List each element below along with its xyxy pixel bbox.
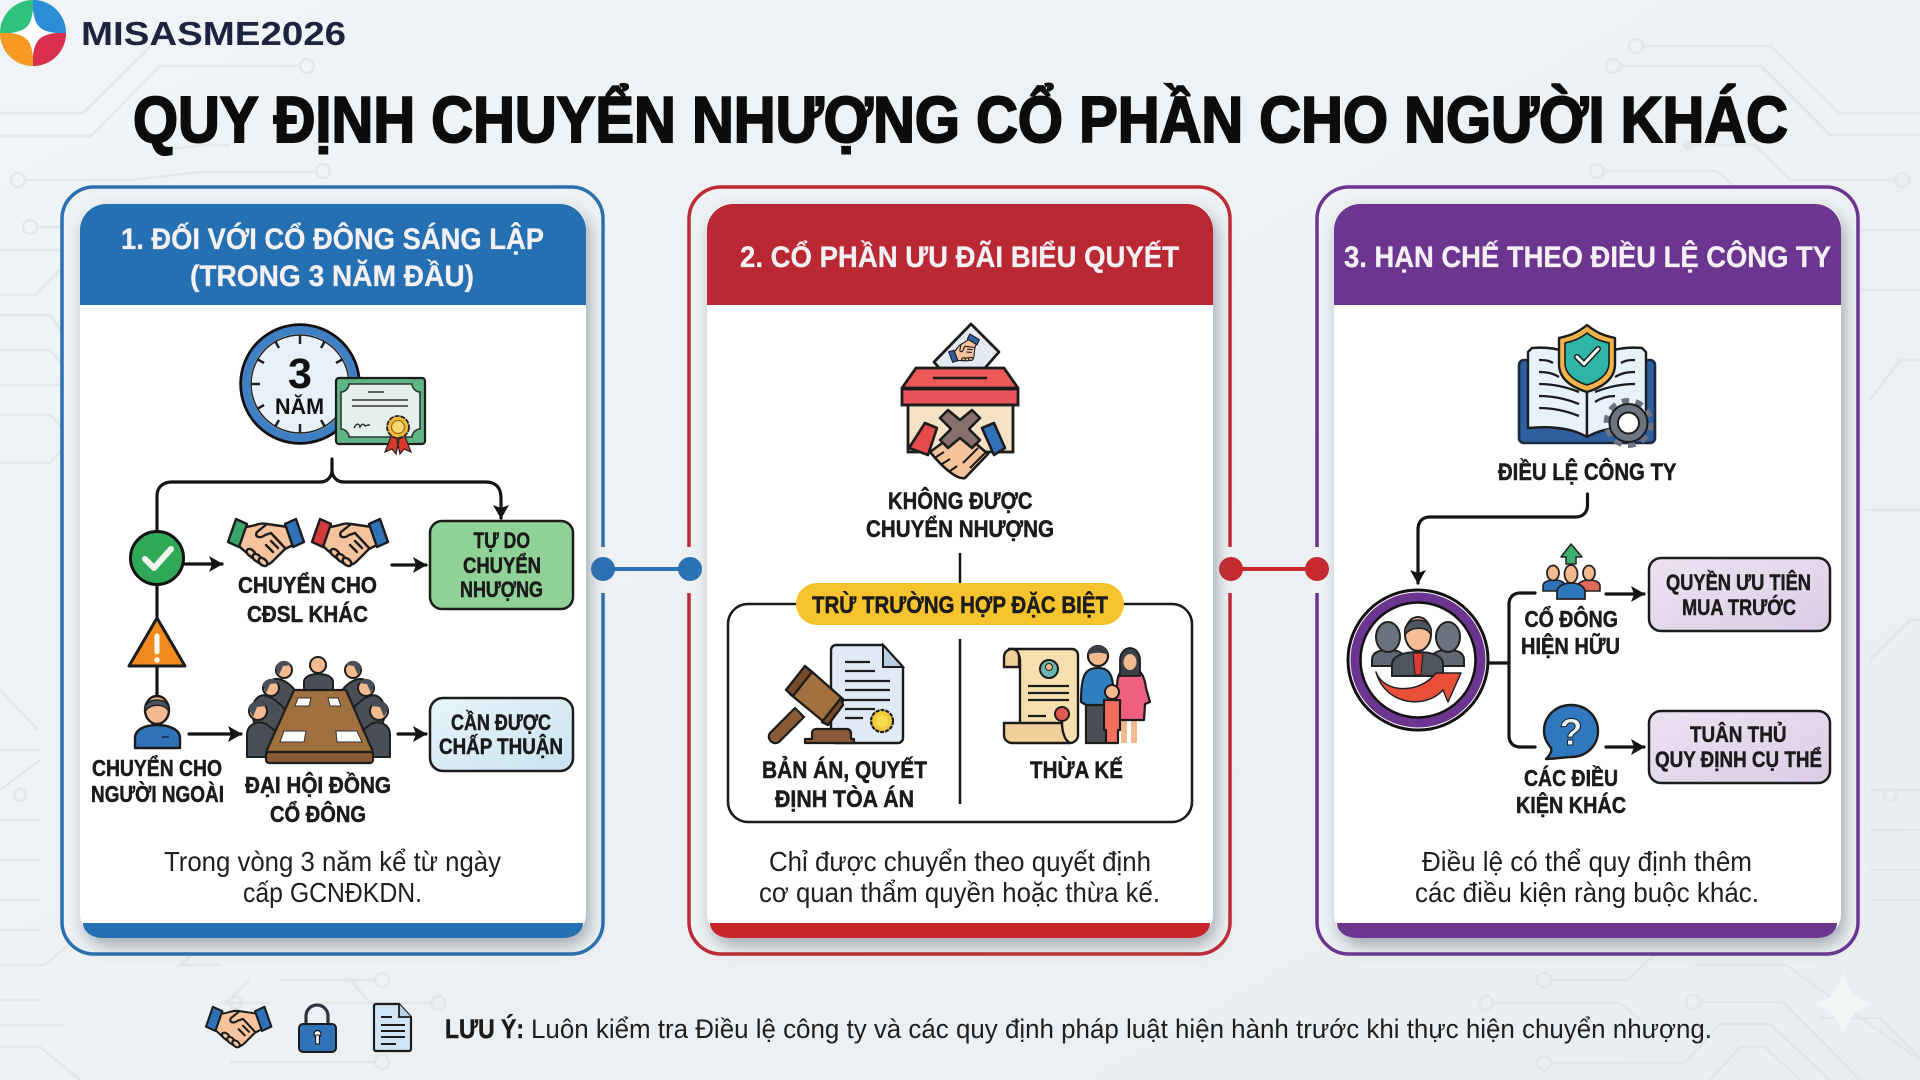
header band blue <box>80 204 586 305</box>
outer frame: panel 2 <box>689 187 1230 954</box>
box: free to transfer <box>430 521 573 609</box>
footer band blue <box>83 923 583 938</box>
arrow <box>1606 592 1644 596</box>
label: to outsiders: NGƯỜI NGOÀI <box>91 780 224 807</box>
footer note: LƯU Ý: <box>445 1013 524 1044</box>
box: needs approval: CẦN ĐƯỢC <box>451 710 551 735</box>
label: charter: ĐIỀU LỆ CÔNG TY <box>1498 458 1676 486</box>
icon: document <box>374 1004 411 1051</box>
bracket arrows from clock <box>157 459 501 530</box>
box: pre-emptive right: MUA TRƯỚC <box>1682 595 1796 620</box>
header band purple <box>1334 204 1841 305</box>
label: other conditions: KIỆN KHÁC <box>1516 791 1626 818</box>
label: court judgment: ĐỊNH TÒA ÁN <box>775 785 914 813</box>
icon: question bubble: ? <box>1559 712 1583 754</box>
pill: special cases <box>796 583 1124 625</box>
panel 3 note <box>1415 846 1759 908</box>
exceptions box <box>728 583 1192 822</box>
panel 2 note: Chỉ được chuyển theo quyết định <box>769 846 1151 877</box>
icon: footer handshake <box>206 1007 271 1049</box>
footer band purple <box>1337 923 1837 938</box>
icon: ballot box <box>902 324 1018 478</box>
heading 1: 1. ĐỐI VỚI CỔ ĐÔNG SÁNG LẬP <box>121 222 544 256</box>
heading 1 <box>121 222 544 293</box>
icon: existing shareholders <box>1543 544 1600 599</box>
icon: gavel and document <box>769 645 903 743</box>
connector blue <box>591 547 702 593</box>
icon: will and family <box>1004 645 1150 743</box>
panel 3 note: Điều lệ có thể quy định thêm <box>1422 846 1752 877</box>
label: to other founders <box>238 571 377 627</box>
panel: founders <box>80 204 586 938</box>
label: other conditions <box>1516 764 1626 818</box>
heading 1: (TRONG 3 NĂM ĐẦU) <box>190 259 474 293</box>
header band red <box>707 204 1213 305</box>
icon: clock <box>241 325 359 443</box>
icon: question bubble <box>1544 705 1598 759</box>
arrow <box>184 562 222 566</box>
footer note: Luôn kiểm tra Điều lệ công ty và các quy định pháp luật hiện hành trước khi thực hiện chuyển nhượng. <box>531 1014 1712 1044</box>
panel 2 note <box>759 846 1160 908</box>
icon: certificate <box>336 378 425 454</box>
box: free to transfer: NHƯỢNG <box>460 577 543 602</box>
icon: check circle <box>130 532 184 584</box>
arrow <box>398 732 426 736</box>
label: general meeting <box>245 771 391 827</box>
label: to outsiders: CHUYỂN CHO <box>92 754 222 781</box>
label: to other founders: CĐSL KHÁC <box>247 600 368 627</box>
box: pre-emptive right <box>1649 558 1830 631</box>
box: pre-emptive right: QUYỀN ƯU TIÊN <box>1666 570 1811 595</box>
pill: special cases: TRỪ TRƯỜNG HỢP ĐẶC BIỆT <box>812 591 1108 619</box>
panel 1 note: cấp GCNĐKDN. <box>243 877 422 908</box>
panel 3 note: các điều kiện ràng buộc khác. <box>1415 877 1759 908</box>
heading 3: 3. HẠN CHẾ THEO ĐIỀU LỆ CÔNG TY <box>1344 240 1831 274</box>
label: existing shareholders: HIỆN HỮU <box>1521 632 1620 659</box>
icon: outsider person <box>135 696 180 748</box>
logo: MISASME2026 <box>81 15 346 52</box>
panel: preferred voting shares <box>707 204 1213 938</box>
panel 2 note: cơ quan thẩm quyền hoặc thừa kế. <box>759 877 1160 908</box>
icon: handshake green-blue <box>228 519 304 568</box>
label: other conditions: CÁC ĐIỀU <box>1524 764 1618 791</box>
icon: warning triangle <box>129 618 185 666</box>
panel: charter restrictions <box>1334 204 1841 938</box>
outer frame: panel 1 <box>62 187 603 954</box>
label: not transferable: KHÔNG ĐƯỢC <box>888 487 1032 515</box>
label: court judgment <box>762 755 927 813</box>
label: court judgment: BẢN ÁN, QUYẾT <box>762 755 927 784</box>
box: free to transfer: TỰ DO <box>474 528 530 553</box>
label: existing shareholders: CỔ ĐÔNG <box>1524 605 1618 632</box>
connector line <box>959 553 961 584</box>
panel 1 note <box>164 846 501 908</box>
icon: clock: 3 <box>288 350 312 398</box>
icon: charter book <box>1519 325 1655 444</box>
label: to outsiders <box>91 754 224 807</box>
label: inheritance: THỪA KẾ <box>1030 756 1123 784</box>
label: not transferable: CHUYỂN NHƯỢNG <box>866 515 1054 543</box>
box: comply <box>1649 711 1830 783</box>
vertical flow line <box>155 530 159 695</box>
branch lines <box>1489 593 1535 747</box>
label: general meeting: ĐẠI HỘI ĐỒNG <box>245 771 391 798</box>
panel 1 note: Trong vòng 3 năm kể từ ngày <box>164 846 501 877</box>
arrow <box>189 732 241 736</box>
box: free to transfer: CHUYỂN <box>463 553 541 578</box>
box: needs approval: CHẤP THUẬN <box>439 734 563 759</box>
arrow <box>1606 745 1644 749</box>
arrow <box>392 563 426 567</box>
icon: lock <box>299 1005 336 1052</box>
outer frame: panel 3 <box>1317 187 1858 954</box>
icon: clock: NĂM <box>275 394 324 419</box>
label: general meeting: CỔ ĐÔNG <box>270 800 366 827</box>
arrow: charter to shareholders <box>1418 494 1588 583</box>
connector red <box>1219 547 1329 593</box>
sparkle watermark <box>1810 970 1877 1037</box>
box: needs approval <box>430 698 573 771</box>
logo <box>0 0 346 66</box>
box: comply: QUY ĐỊNH CỤ THỂ <box>1655 747 1822 772</box>
label: to other founders: CHUYỂN CHO <box>238 571 377 598</box>
label: existing shareholders <box>1521 605 1620 659</box>
box: comply: TUÂN THỦ <box>1690 722 1786 747</box>
heading 2: 2. CỔ PHẦN ƯU ĐÃI BIỂU QUYẾT <box>740 240 1179 274</box>
icon: shareholders circle <box>1348 590 1488 730</box>
footer band red <box>710 923 1210 938</box>
label: not transferable <box>866 487 1054 543</box>
icon: shareholders meeting <box>247 657 390 763</box>
icon: handshake red-blue <box>312 519 388 568</box>
